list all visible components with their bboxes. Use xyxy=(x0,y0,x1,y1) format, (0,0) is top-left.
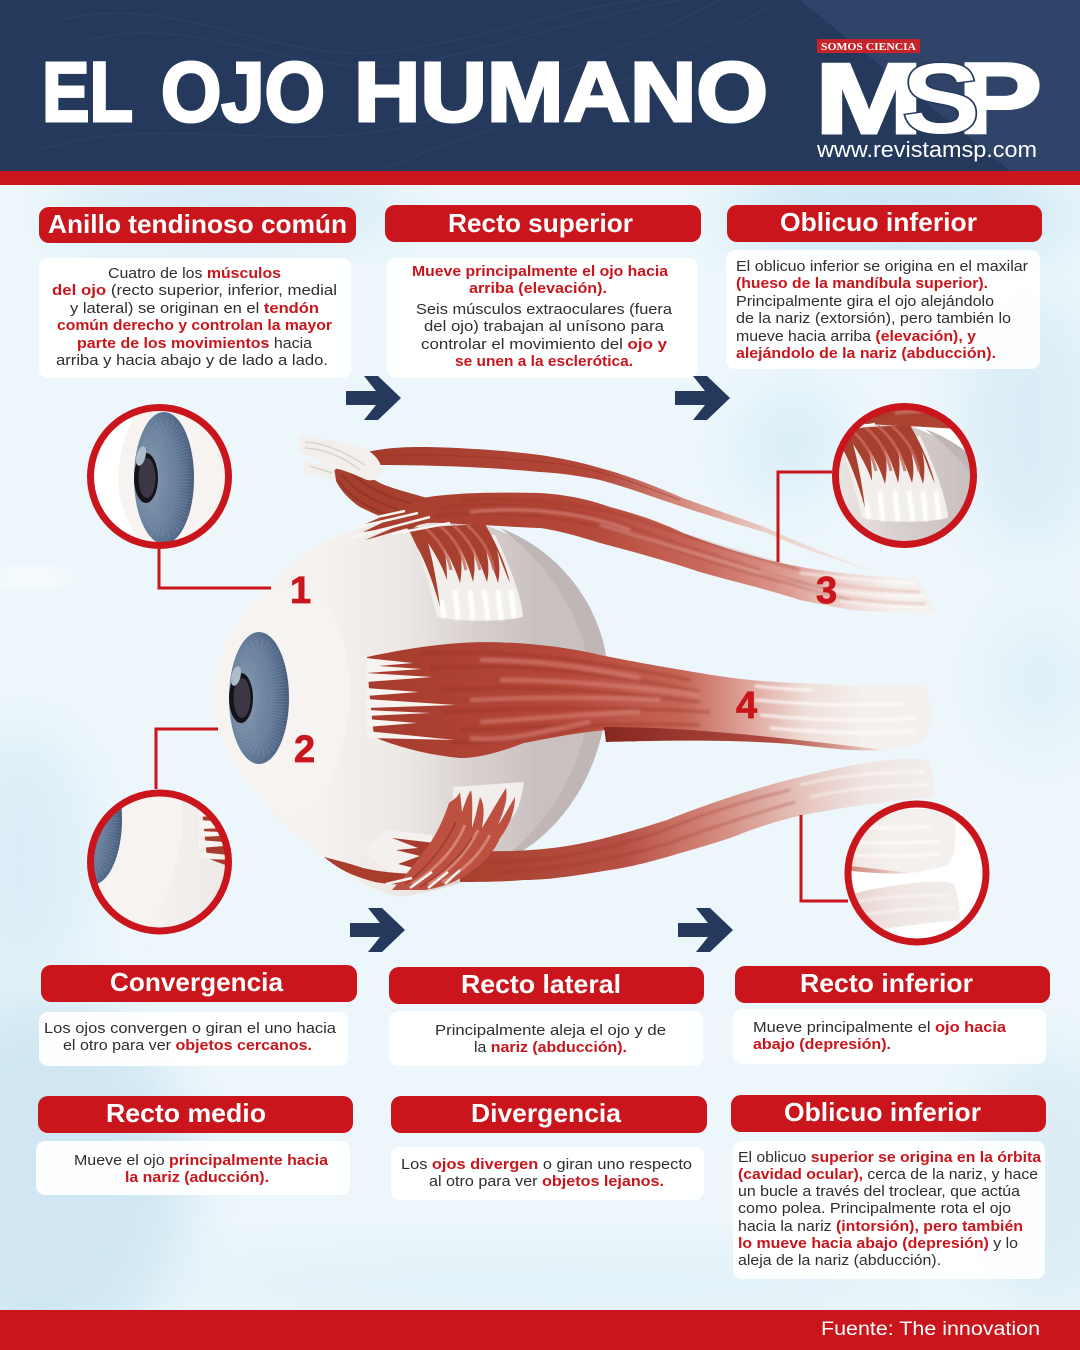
text block: el otro para ver objetos cercanos. xyxy=(63,1037,312,1054)
text block: Cuatro de los músculos xyxy=(108,265,281,282)
panel: Convergencia xyxy=(39,965,357,1066)
callout 3: superior rectus inset: 3 xyxy=(816,570,837,612)
callout 4: tendon inset: 4 xyxy=(736,685,757,727)
text block: de la nariz (extorsión), pero también lo xyxy=(736,310,1011,327)
logo: MSP: www.revistamsp.com xyxy=(816,137,1037,162)
text block: como polea. Principalmente rota el ojo xyxy=(738,1200,1011,1217)
heading xyxy=(41,965,357,1002)
logo: MSP: M xyxy=(815,43,923,155)
heading: Recto superior xyxy=(448,208,633,238)
text block: lo mueve hacia abajo (depresión) y lo xyxy=(738,1235,1018,1252)
heading: Recto inferior xyxy=(800,968,973,998)
text block xyxy=(733,1141,1045,1279)
arrow: bottom left xyxy=(350,908,405,952)
text block: la nariz (aducción). xyxy=(125,1169,269,1186)
text block xyxy=(733,1009,1046,1064)
text block: común derecho y controlan la mayor xyxy=(57,317,332,334)
text block: mueve hacia arriba (elevación), y xyxy=(736,328,977,345)
logo: MSP: P xyxy=(958,43,1042,155)
text block: Los ojos divergen o giran uno respecto xyxy=(401,1156,692,1173)
eye with muscles illustration xyxy=(213,435,935,897)
text block xyxy=(39,1012,348,1066)
text block xyxy=(387,258,698,378)
text block: abajo (depresión). xyxy=(753,1036,891,1053)
text block: Mueve principalmente el ojo hacia xyxy=(753,1019,1007,1036)
text block: arriba (elevación). xyxy=(469,280,607,297)
heading xyxy=(38,1096,353,1133)
heading xyxy=(727,205,1042,242)
title: OJO xyxy=(161,45,325,139)
text block: la nariz (abducción). xyxy=(474,1039,627,1056)
logo: MSP: SOMOS CIENCIA xyxy=(821,41,916,53)
text block: Principalmente aleja el ojo y de xyxy=(435,1022,666,1039)
heading: Recto lateral xyxy=(461,969,621,999)
arrow: top left xyxy=(346,376,401,420)
text block: y lateral) se originan en el tendón xyxy=(70,300,319,317)
text block: Seis músculos extraoculares (fuera xyxy=(416,301,673,318)
text block: El oblicuo inferior se origina en el maxilar xyxy=(736,258,1028,275)
text block: (cavidad ocular), cerca de la nariz, y hace xyxy=(738,1166,1038,1183)
panel: Anillo tendinoso común xyxy=(39,207,356,378)
text block xyxy=(389,1011,703,1066)
arrow: bottom right xyxy=(678,908,733,952)
panel: Divergencia xyxy=(391,1096,707,1200)
title xyxy=(42,45,768,139)
arrow: top right xyxy=(675,376,730,420)
panel: Oblicuo inferior (órbita) xyxy=(731,1095,1046,1279)
footer: Fuente: The innovation xyxy=(821,1319,1040,1340)
text block: del ojo (recto superior, inferior, medial xyxy=(52,282,337,299)
text block: hacia la nariz (intorsión), pero también xyxy=(738,1218,1023,1235)
text block: al otro para ver objetos lejanos. xyxy=(429,1173,664,1190)
text block: Mueve principalmente el ojo hacia xyxy=(412,263,669,280)
panel: Recto superior xyxy=(385,205,701,378)
callout 1: iris inset: 1 xyxy=(290,570,311,612)
heading: Anillo tendinoso común xyxy=(48,209,347,239)
heading: Divergencia xyxy=(471,1098,622,1128)
text block: del ojo) trabajan al unísono para xyxy=(424,318,665,335)
text block: Mueve el ojo principalmente hacia xyxy=(74,1152,329,1169)
title: HUMANO xyxy=(354,45,768,139)
panel: Recto medio xyxy=(36,1096,353,1195)
header band xyxy=(0,0,1080,171)
logo: MSP: S xyxy=(902,43,980,155)
text block xyxy=(391,1147,704,1200)
panel: Recto lateral xyxy=(389,967,704,1066)
text block xyxy=(39,258,351,378)
panel: Recto inferior xyxy=(733,966,1050,1064)
text block: se unen a la esclerótica. xyxy=(455,353,633,370)
logo: MSP xyxy=(815,39,1042,162)
callout 3: superior rectus inset xyxy=(776,403,977,604)
text block: El oblicuo superior se origina en la órbita xyxy=(738,1149,1042,1166)
text block: arriba y hacia abajo y de lado a lado. xyxy=(56,352,328,369)
text block xyxy=(726,250,1040,369)
callout 1: iris inset xyxy=(87,404,310,604)
text block: parte de los movimientos hacia xyxy=(77,335,313,352)
heading xyxy=(735,966,1050,1003)
heading: Recto medio xyxy=(106,1098,266,1128)
text block: Principalmente gira el ojo alejándolo xyxy=(736,293,994,310)
callout 4: tendon inset xyxy=(736,691,990,946)
title: EL xyxy=(42,45,133,139)
footer xyxy=(0,1310,1080,1350)
text block: alejándolo de la nariz (abducción). xyxy=(736,345,996,362)
text block: (hueso de la mandíbula superior). xyxy=(736,275,988,292)
text block: aleja de la nariz (abducción). xyxy=(738,1252,941,1269)
callout 2: medial rectus inset: 2 xyxy=(294,729,315,771)
heading xyxy=(731,1095,1046,1132)
panel: Oblicuo inferior (superior) xyxy=(726,205,1042,369)
heading xyxy=(389,967,704,1004)
heading: Oblicuo inferior xyxy=(780,207,977,237)
text block: controlar el movimiento del ojo y xyxy=(421,336,668,353)
heading xyxy=(385,205,701,242)
red strip under header xyxy=(0,171,1080,185)
heading xyxy=(391,1096,707,1133)
text block: un bucle a través del troclear, que actúa xyxy=(738,1183,1021,1200)
text block: Los ojos convergen o giran el uno hacia xyxy=(44,1020,337,1037)
callout 2: medial rectus inset xyxy=(87,728,314,934)
heading: Oblicuo inferior xyxy=(784,1097,981,1127)
heading: Convergencia xyxy=(110,967,284,997)
text block xyxy=(36,1141,350,1195)
